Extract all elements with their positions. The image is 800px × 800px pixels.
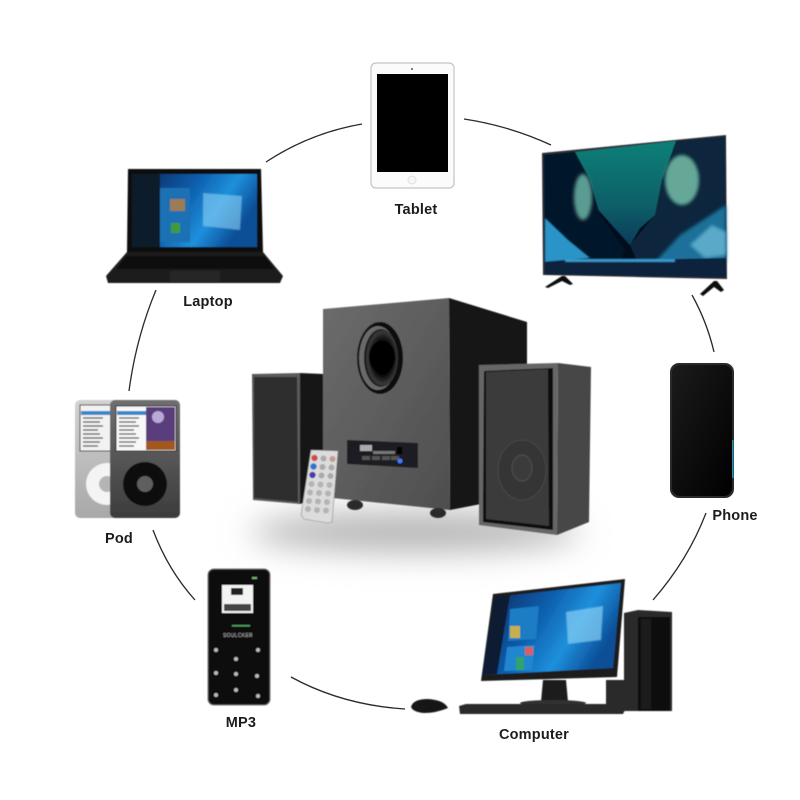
device: MP3 player xyxy=(208,569,270,705)
bass port xyxy=(357,322,403,394)
left satellite speaker xyxy=(252,373,323,504)
control panel xyxy=(347,440,418,468)
subwoofer xyxy=(323,298,527,518)
label: pod: Pod xyxy=(105,531,133,547)
device: TV xyxy=(542,135,727,296)
remote control xyxy=(301,450,338,523)
monitor xyxy=(481,579,625,706)
device: laptop xyxy=(106,169,283,283)
label: MP3: MP3 xyxy=(226,715,256,731)
label: computer: Computer xyxy=(499,727,569,743)
dark pod xyxy=(110,400,180,518)
label: tablet: Tablet xyxy=(395,202,437,218)
keyboard xyxy=(459,704,628,714)
device: tablet xyxy=(371,63,454,188)
silver pod xyxy=(75,400,128,518)
device: MP3 player: SOULCKER xyxy=(223,633,253,639)
label: phone: Phone xyxy=(712,508,758,524)
device: phone xyxy=(670,363,734,498)
label: laptop: Laptop xyxy=(183,294,233,310)
connecting ring arcs xyxy=(129,119,714,709)
tower xyxy=(606,610,672,711)
floor shadow xyxy=(250,512,580,552)
speaker system xyxy=(252,298,591,535)
right satellite speaker xyxy=(479,363,591,535)
device: computer xyxy=(411,579,672,714)
device: pod players xyxy=(75,400,180,518)
mouse xyxy=(411,699,448,713)
